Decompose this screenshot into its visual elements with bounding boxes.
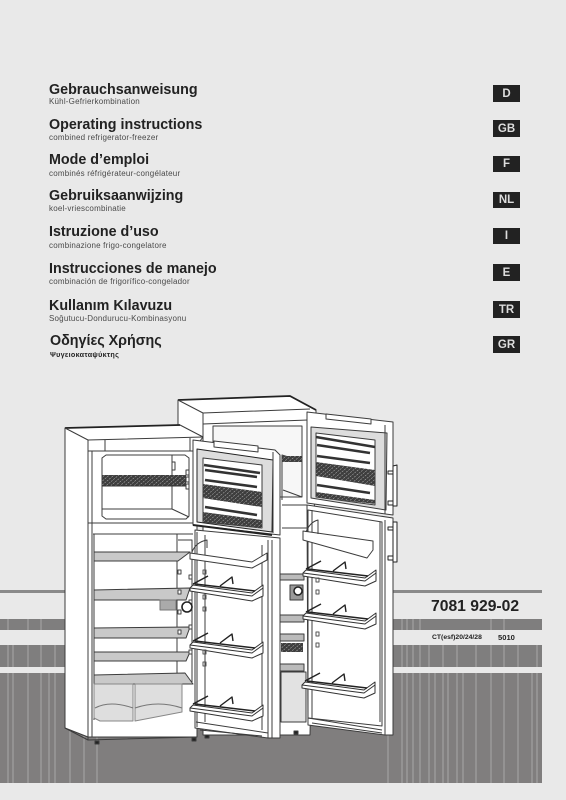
language badge GB: GB xyxy=(498,123,515,135)
right fridge freezer door handle xyxy=(388,465,397,506)
fridge feet xyxy=(95,731,298,744)
language badge E: E xyxy=(503,267,510,279)
right fridge fridge door handle xyxy=(388,522,397,562)
left fridge door xyxy=(190,530,280,738)
subheading: German: Kühl-Gefrierkombination xyxy=(49,97,140,106)
heading: German: Gebrauchsanweisung xyxy=(49,82,198,98)
language badge F: F xyxy=(503,158,510,170)
left freezer door xyxy=(193,440,280,535)
subheading: English: combined refrigerator-freezer xyxy=(49,133,158,142)
background bands xyxy=(0,590,542,783)
document number: 7081 929-02 xyxy=(431,598,519,615)
heading: French: Mode d’emploi xyxy=(49,152,149,168)
heading: Spanish: Instrucciones de manejo xyxy=(49,261,217,277)
subheading: Italian: combinazione frigo-congelatore xyxy=(49,241,167,250)
subheading: Dutch: koel-vriescombinatie xyxy=(49,204,126,213)
heading: Dutch: Gebruiksaanwijzing xyxy=(49,188,183,204)
language badge TR: TR xyxy=(499,304,514,316)
subheading: Spanish: combinación de frigorífico-congelador xyxy=(49,277,190,286)
right fridge freezer door xyxy=(307,412,393,515)
right fridge body xyxy=(178,396,316,735)
heading: Greek: Οδηγίες Χρήσης xyxy=(50,333,162,349)
left fridge body xyxy=(65,425,203,740)
model code: CT(esf)20/24/28 xyxy=(432,634,482,641)
subheading: Greek: Ψυγειοκαταψύκτης xyxy=(50,350,119,359)
heading: Turkish: Kullanım Kılavuzu xyxy=(49,298,172,314)
language badge GR: GR xyxy=(498,339,515,351)
heading: Italian: Istruzione d’uso xyxy=(49,224,159,240)
language badge D xyxy=(493,85,520,102)
language badge TR xyxy=(493,301,520,318)
language badge I xyxy=(493,228,520,244)
language badge E xyxy=(493,264,520,281)
heading: English: Operating instructions xyxy=(49,117,202,133)
subheading: French: combinés réfrigérateur-congélateur xyxy=(49,169,180,178)
language badge F xyxy=(493,156,520,172)
subheading: Turkish: Soğutucu-Dondurucu-Kombinasyonu xyxy=(49,314,186,323)
left fridge compartment xyxy=(93,534,193,721)
language badge NL: NL xyxy=(499,194,514,206)
language badge D: D xyxy=(502,88,511,100)
language badge I: I xyxy=(505,230,508,242)
language badge GR xyxy=(493,336,520,353)
left freezer compartment xyxy=(102,455,189,519)
right fridge fridge door xyxy=(302,505,393,735)
language badge GB xyxy=(493,120,520,137)
language badge NL xyxy=(493,192,520,208)
revision code: 5010 xyxy=(498,633,515,642)
